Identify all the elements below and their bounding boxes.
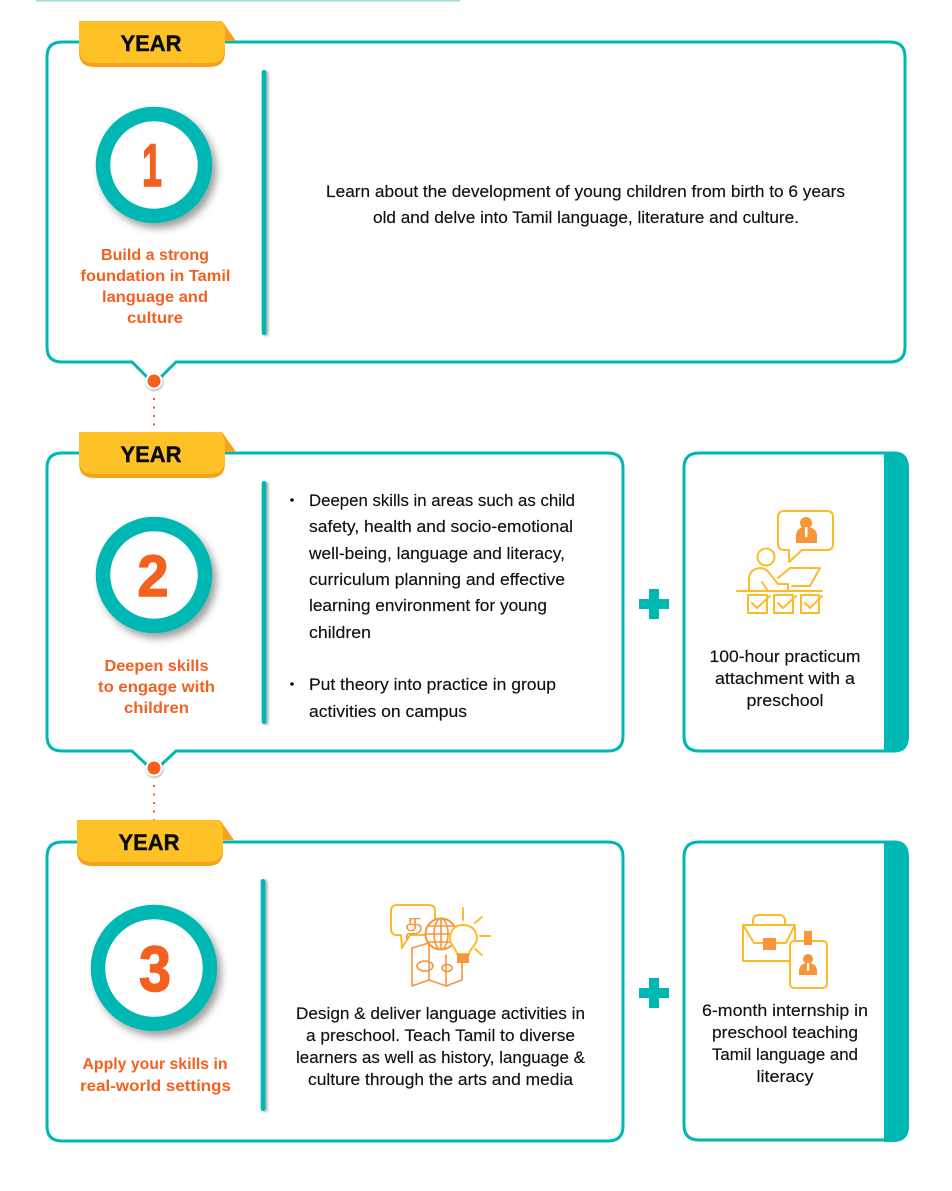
year 1 tab (79, 21, 236, 67)
year 2 subtitle: Deepen skills (104, 658, 209, 675)
icon: teacher at desk with checkboxes (737, 511, 833, 613)
plus sign: year 3 (639, 978, 669, 1008)
panel: year 3 (47, 820, 623, 1141)
year 1 subtitle (80, 247, 230, 327)
connector: year 1 to year 2 (146, 372, 162, 432)
year 3 description: learners as well as history, language & (296, 1049, 585, 1067)
practicum card (684, 452, 909, 752)
year 1 description: Learn about the development of young children from birth to 6 years (326, 183, 845, 201)
cropped page heading sliver (36, 0, 460, 2)
icon: Tamil speech bubble, globe, map and light bulb: த (405, 907, 423, 940)
panel: year 2 practicum (684, 452, 909, 752)
icon: Tamil speech bubble, globe, map and light bulb (391, 905, 490, 986)
year 2 bullet list: Deepen skills in areas such as child (309, 492, 575, 510)
internship caption (702, 1002, 868, 1086)
practicum caption (710, 648, 860, 710)
year 1 subtitle: foundation in Tamil (80, 268, 230, 285)
year 3 tab: YEAR (118, 830, 180, 855)
year 1 description: old and delve into Tamil language, literature and culture. (373, 209, 799, 227)
practicum caption: preschool (746, 692, 824, 710)
year 2 subtitle: children (124, 700, 189, 717)
year 3 description (296, 1005, 585, 1089)
year 2 bullet list: children (309, 624, 371, 642)
year 2 tab: YEAR (120, 442, 182, 467)
connector: year 2 to year 3 (146, 760, 162, 820)
year 2 bullet list: well-being, language and literacy, (308, 545, 565, 563)
year 3 subtitle: real-world settings (80, 1078, 231, 1095)
year 3 divider (261, 879, 265, 1111)
year 1 tab: YEAR (120, 31, 182, 56)
year 2 bullet list (290, 492, 575, 721)
panel: year 1 (47, 21, 905, 377)
year 1 number badge: 1 (142, 132, 162, 199)
icon: briefcase and ID badge (743, 915, 827, 988)
year 3 number badge (98, 912, 210, 1024)
panel 2 outline with notch (47, 453, 623, 765)
year 2 subtitle (98, 658, 215, 717)
year 2 tab (79, 432, 236, 478)
year 1 subtitle: culture (127, 310, 183, 327)
panel: year 2 (47, 432, 623, 765)
year 2 bullet list: Put theory into practice in group (309, 676, 556, 694)
year 2 number badge: 2 (138, 544, 168, 609)
practicum caption: 100-hour practicum (710, 648, 860, 666)
year 1 number badge (103, 114, 205, 216)
panel 3 outline (47, 842, 623, 1141)
internship card (684, 841, 909, 1142)
year 3 description: Design & deliver language activities in (296, 1005, 585, 1023)
year 3 subtitle: Apply your skills in (82, 1056, 228, 1073)
internship caption: literacy (756, 1068, 814, 1086)
year 2 bullet list: activities on campus (309, 703, 467, 721)
year 1 divider (262, 70, 266, 335)
year 3 number badge: 3 (139, 933, 171, 1005)
year 2 divider (262, 481, 266, 724)
internship caption: Tamil language and (712, 1046, 858, 1064)
panel: year 3 internship (684, 841, 909, 1142)
year 2 bullet list: curriculum planning and effective (309, 571, 565, 589)
practicum caption: attachment with a (715, 670, 856, 688)
year 2 bullet list: learning environment for young (309, 597, 547, 615)
year 1 subtitle: language and (102, 289, 208, 306)
internship caption: 6-month internship in (702, 1002, 868, 1020)
internship caption: preschool teaching (712, 1024, 858, 1042)
plus sign: year 2 (639, 589, 669, 619)
year 2 bullet list: safety, health and socio-emotional (309, 518, 573, 536)
year 1 subtitle: Build a strong (101, 247, 209, 264)
year 2 number badge (103, 524, 205, 626)
year 3 description: culture through the arts and media (308, 1071, 574, 1089)
year 3 description: a preschool. Teach Tamil to diverse (306, 1027, 575, 1045)
year 3 tab (77, 820, 234, 866)
year 3 subtitle (80, 1056, 231, 1095)
year 1 description (326, 183, 845, 227)
panel 1 outline with notch (47, 42, 905, 377)
year 2 subtitle: to engage with (98, 679, 215, 696)
